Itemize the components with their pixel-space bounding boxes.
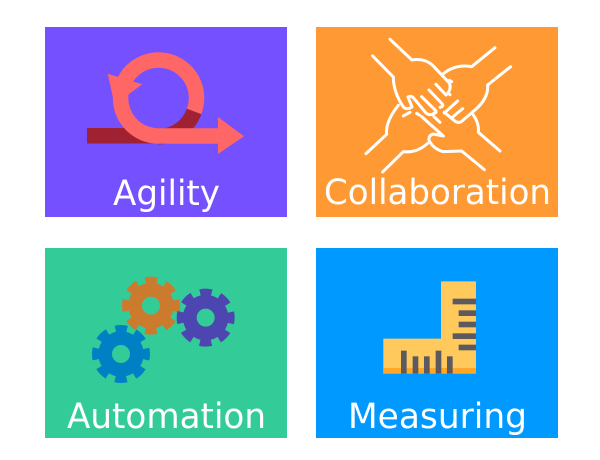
heading: Automation: Automation (67, 397, 266, 437)
panel: collaboration (316, 27, 558, 217)
heading: Collaboration: Collaboration (324, 173, 551, 213)
icon: stacked hands (366, 39, 511, 172)
icon: looping arrow (87, 60, 244, 154)
heading: Agility: Agility (113, 174, 220, 214)
panel: measuring (316, 248, 558, 438)
icon: gears (97, 282, 230, 378)
icon: L-shaped ruler (383, 281, 476, 374)
icon: purple gear (182, 294, 230, 342)
panel: automation (45, 248, 287, 438)
icon: blue gear (97, 330, 145, 378)
panel: agility (45, 27, 287, 217)
heading: Measuring: Measuring (348, 397, 527, 437)
icon: orange gear (127, 282, 175, 330)
